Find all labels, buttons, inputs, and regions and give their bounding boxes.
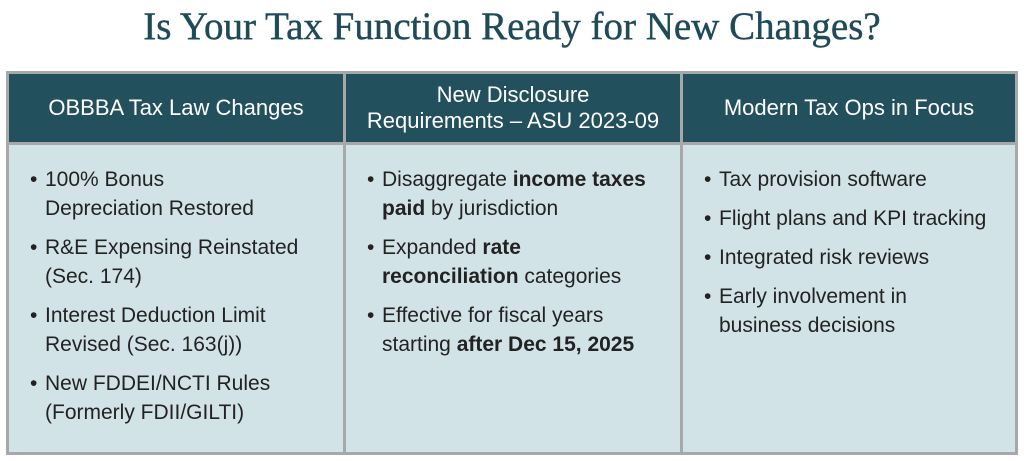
list: disclosure items: Expanded rate: [382, 236, 521, 259]
header: OBBBA: [9, 74, 343, 145]
list: disclosure items: Effective for fiscal years: [382, 304, 603, 327]
header: modern tax ops: Modern Tax Ops in Focus: [724, 95, 974, 120]
list: disclosure items: Disaggregate income taxes: [382, 168, 646, 191]
list: OBBBA items: New FDDEI/NCTI Rules: [45, 372, 270, 395]
list: disclosure items: paid by jurisdiction: [382, 197, 558, 220]
list: OBBBA items: [30, 168, 298, 424]
list: OBBBA items: Depreciation Restored: [45, 197, 254, 220]
list: disclosure items: starting after Dec 15, 2025: [382, 333, 634, 356]
title: Is Your Tax Function Ready for New Changes?: [143, 5, 881, 48]
header: disclosure: [346, 74, 680, 145]
list: OBBBA items: R&E Expensing Reinstated: [45, 236, 298, 259]
list: tax ops items: business decisions: [719, 314, 895, 337]
panel: disclosure: [346, 74, 680, 452]
list: OBBBA items: Interest Deduction Limit: [45, 304, 266, 327]
header: disclosure: New Disclosure: [437, 82, 589, 107]
list: OBBBA items: (Formerly FDII/GILTI): [45, 401, 244, 424]
list: tax ops items: Integrated risk reviews: [719, 246, 929, 269]
list: tax ops items: Early involvement in: [719, 285, 907, 308]
panel: OBBBA: [9, 74, 343, 452]
list: tax ops items: Tax provision software: [719, 168, 927, 191]
list: OBBBA items: 100% Bonus: [45, 168, 164, 191]
header: disclosure: Requirements – ASU 2023-09: [367, 108, 659, 133]
panel: modern tax ops: [683, 74, 1015, 452]
list: OBBBA items: Revised (Sec. 163(j)): [45, 333, 242, 356]
list: disclosure items: reconciliation categories: [382, 265, 621, 288]
list: disclosure items: [368, 168, 646, 356]
header: modern tax ops: [683, 74, 1015, 145]
list: OBBBA items: (Sec. 174): [45, 265, 142, 288]
list: tax ops items: Flight plans and KPI tracking: [719, 207, 986, 230]
header: OBBBA: OBBBA Tax Law Changes: [48, 95, 304, 120]
list: tax ops items: [704, 168, 986, 337]
